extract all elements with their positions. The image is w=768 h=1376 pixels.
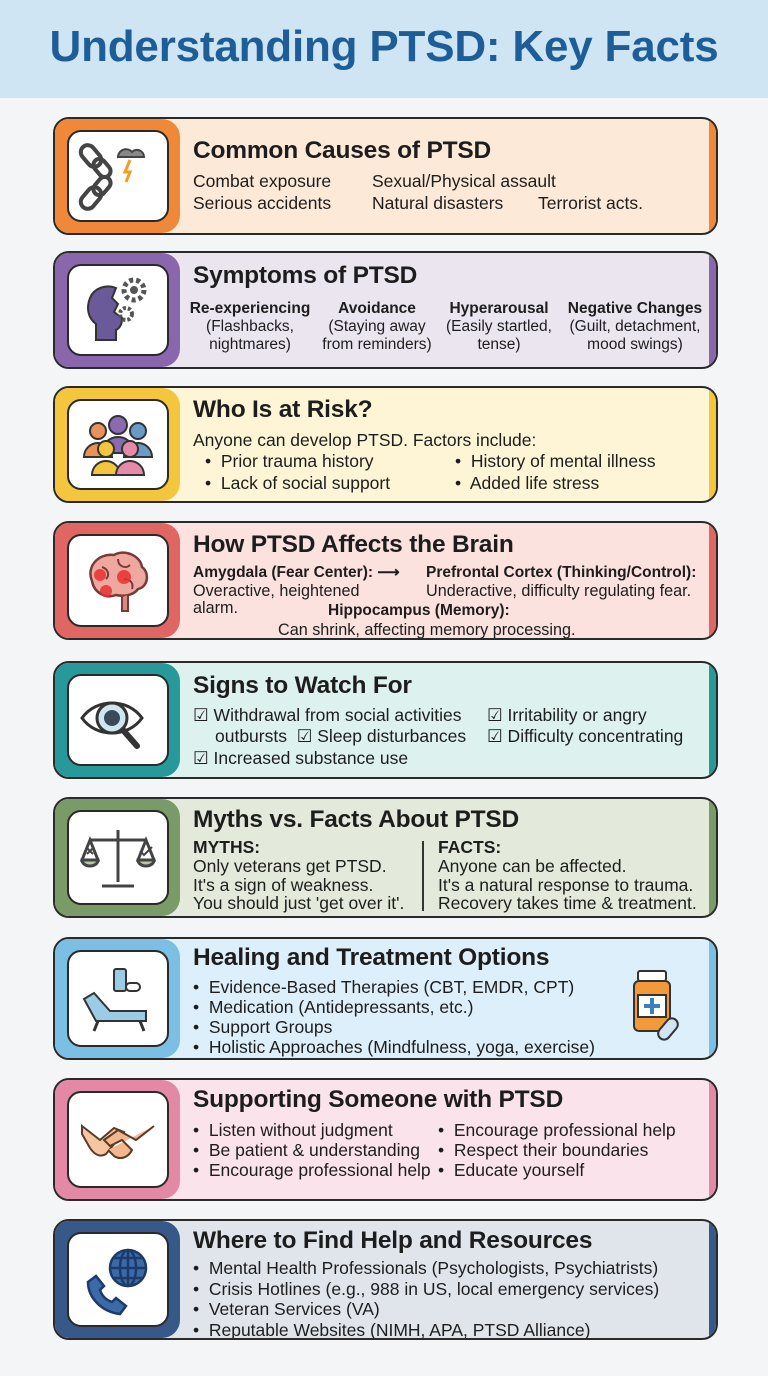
panel: resources: • Crisis Hotlines (e.g., 988 in US, local emergency services) [193,1279,659,1299]
heading: Signs to Watch For [193,672,412,699]
panel: myths vs facts: It's a natural response to trauma. [438,875,693,895]
heading: Where to Find Help and Resources [193,1227,592,1254]
panel: causes: Sexual/Physical assault [372,171,556,191]
panel: brain [53,521,718,640]
icon: scales [67,810,169,905]
panel: resources [53,1219,718,1340]
panel: supporting someone: • Educate yourself [438,1160,584,1180]
myths column [193,837,404,913]
panel: symptoms: (Easily startled, [446,318,552,335]
panel: symptoms: Negative Changes [568,300,702,317]
panel: symptoms: (Staying away [328,318,426,335]
panel: treatment: • Support Groups [193,1017,332,1037]
panel: supporting someone [53,1078,718,1201]
panel: signs: outbursts ☑ Sleep disturbances [215,726,466,746]
panel: risk: • Lack of social support [205,473,390,493]
panel: resources: • Reputable Websites (NIMH, APA, PTSD Alliance) [193,1320,590,1340]
resources list [193,1258,659,1340]
panel: symptoms: Re-experiencing [190,300,310,317]
panel: symptoms: (Flashbacks, [206,318,294,335]
panel: supporting someone: • Listen without judgment [193,1120,393,1140]
panel: brain: Prefrontal Cortex (Thinking/Control): [426,564,696,581]
panel: risk: • Prior trauma history [205,451,374,471]
panel: myths vs facts: Anyone can be affected. [438,856,626,876]
panel: signs: ☑ Withdrawal from social activities [193,705,462,725]
panel: signs [53,661,718,779]
icon: handshake [67,1091,169,1188]
icon: pill bottle [633,970,679,1041]
panel: causes: Combat exposure [193,171,331,191]
heading: Healing and Treatment Options [193,944,549,971]
panel: causes: Serious accidents [193,193,331,213]
title: Understanding PTSD: Key Facts [50,22,718,71]
panel: treatment: • Medication (Antidepressants, etc.) [193,997,473,1017]
panel: brain: Amygdala (Fear Center): ⟶ [193,564,400,581]
panel: signs: ☑ Increased substance use [193,748,408,768]
panel: symptoms: tense) [477,336,521,353]
panel: myths vs facts: You should just 'get over it'. [193,893,404,913]
risk factors [193,430,656,493]
symptom columns [190,300,702,353]
header band [0,0,768,98]
panel: symptoms: mood swings) [587,336,683,353]
panel: supporting someone: • Encourage professional help [438,1120,676,1140]
panel: myths vs facts: MYTHS: [193,837,260,857]
facts column [438,837,697,913]
panel: symptoms: from reminders) [322,336,432,353]
icon: broken chain with storm [67,130,169,222]
panel: treatment [53,937,718,1060]
panel: causes: Terrorist acts. [538,193,643,213]
heading: Who Is at Risk? [193,396,372,423]
heading: Symptoms of PTSD [193,262,417,289]
panel: treatment: • Holistic Approaches (Mindfulness, yoga, exercise) [193,1037,595,1057]
panel: supporting someone: • Encourage professional help [193,1160,431,1180]
panel: symptoms: Hyperarousal [449,300,549,317]
panel: myths vs facts [53,797,718,918]
panel: risk [53,386,718,503]
panel: causes [53,117,718,235]
icon: phone and globe [67,1232,169,1327]
brain regions text [193,564,696,639]
heading: Common Causes of PTSD [193,137,491,164]
panel: risk: • History of mental illness [455,451,656,471]
support list [193,1120,676,1180]
panel: symptoms: (Guilt, detachment, [570,318,700,335]
heading: How PTSD Affects the Brain [193,531,514,558]
panel: risk: Anyone can develop PTSD. Factors include: [193,430,536,450]
panel: symptoms: nightmares) [209,336,291,353]
icon: brain [67,534,169,627]
heading: Myths vs. Facts About PTSD [193,806,519,833]
panel: signs: ☑ Irritability or angry [487,705,647,725]
causes list [193,171,643,213]
panel: signs: ☑ Difficulty concentrating [487,726,683,746]
icon: group of people [67,399,169,490]
panel: brain: alarm. [193,599,238,617]
heading: Supporting Someone with PTSD [193,1086,563,1113]
panel: myths vs facts: Recovery takes time & treatment. [438,893,697,913]
panel: risk: • Added life stress [455,473,599,493]
icon: head with gears [67,264,169,356]
checklist [193,705,683,768]
treatment list [193,977,595,1057]
panel: brain: Underactive, difficulty regulating fear. [426,582,691,600]
panel: causes: Natural disasters [372,193,503,213]
panel: resources: • Veteran Services (VA) [193,1299,380,1319]
panel: myths vs facts: It's a sign of weakness. [193,875,373,895]
panel: symptoms: Avoidance [338,300,416,317]
panel: supporting someone: • Be patient & understanding [193,1140,420,1160]
panel: brain: Can shrink, affecting memory processing. [278,621,576,639]
panel: supporting someone: • Respect their boundaries [438,1140,648,1160]
panel: brain: Hippocampus (Memory): [328,602,510,619]
panel: brain: Overactive, heightened [193,582,359,600]
panel: resources: • Mental Health Professionals (Psychologists, Psychiatrists) [193,1258,658,1278]
panel: symptoms [53,251,718,369]
icon: therapy couch and medicine [67,950,169,1047]
icon: eye with magnifier [67,674,169,766]
panel: treatment: • Evidence-Based Therapies (CBT, EMDR, CPT) [193,977,574,997]
panel: myths vs facts: Only veterans get PTSD. [193,856,387,876]
panel: myths vs facts: FACTS: [438,837,501,857]
